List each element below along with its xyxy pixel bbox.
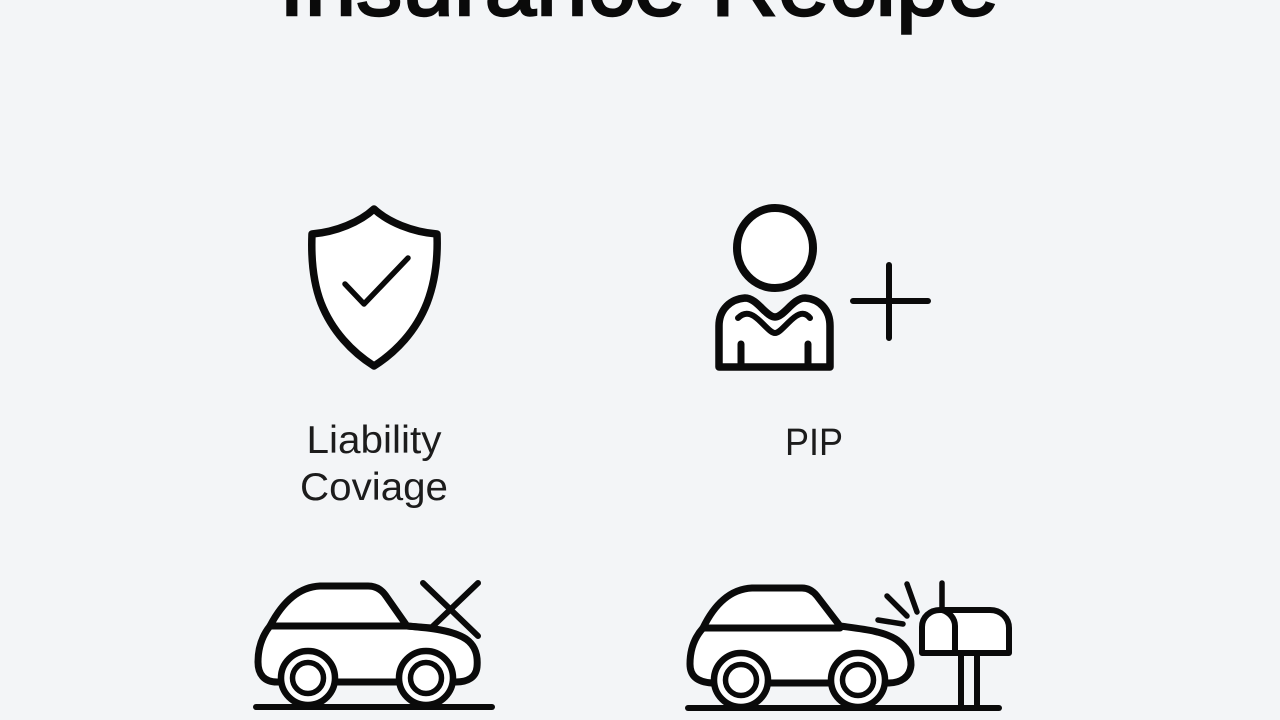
- icon: car body: [258, 586, 477, 682]
- icon: front and rear wheels: [281, 651, 453, 705]
- panel: car with X over the hood: [256, 583, 492, 707]
- icon: impact rays: [878, 584, 917, 624]
- icon: mailbox: [922, 583, 1009, 708]
- label: liability coverage: Coviage: [300, 466, 448, 509]
- body: [719, 298, 830, 367]
- icon: front and rear wheels: [714, 653, 885, 707]
- panel: PIP: [719, 208, 928, 464]
- icon: person with plus sign: [719, 208, 928, 367]
- label: liability coverage: Liability: [306, 419, 442, 462]
- icon: X mark: [423, 583, 478, 636]
- ground line: [688, 705, 999, 711]
- panel: liability coverage: [300, 209, 448, 509]
- plus sign: [853, 265, 928, 338]
- ground line: [256, 704, 492, 710]
- icon: shield with check mark: [312, 209, 437, 366]
- label: PIP: PIP: [785, 422, 843, 464]
- head: [737, 208, 813, 288]
- icon: car body: [690, 588, 911, 683]
- panel: car hitting mailbox: [688, 583, 1009, 708]
